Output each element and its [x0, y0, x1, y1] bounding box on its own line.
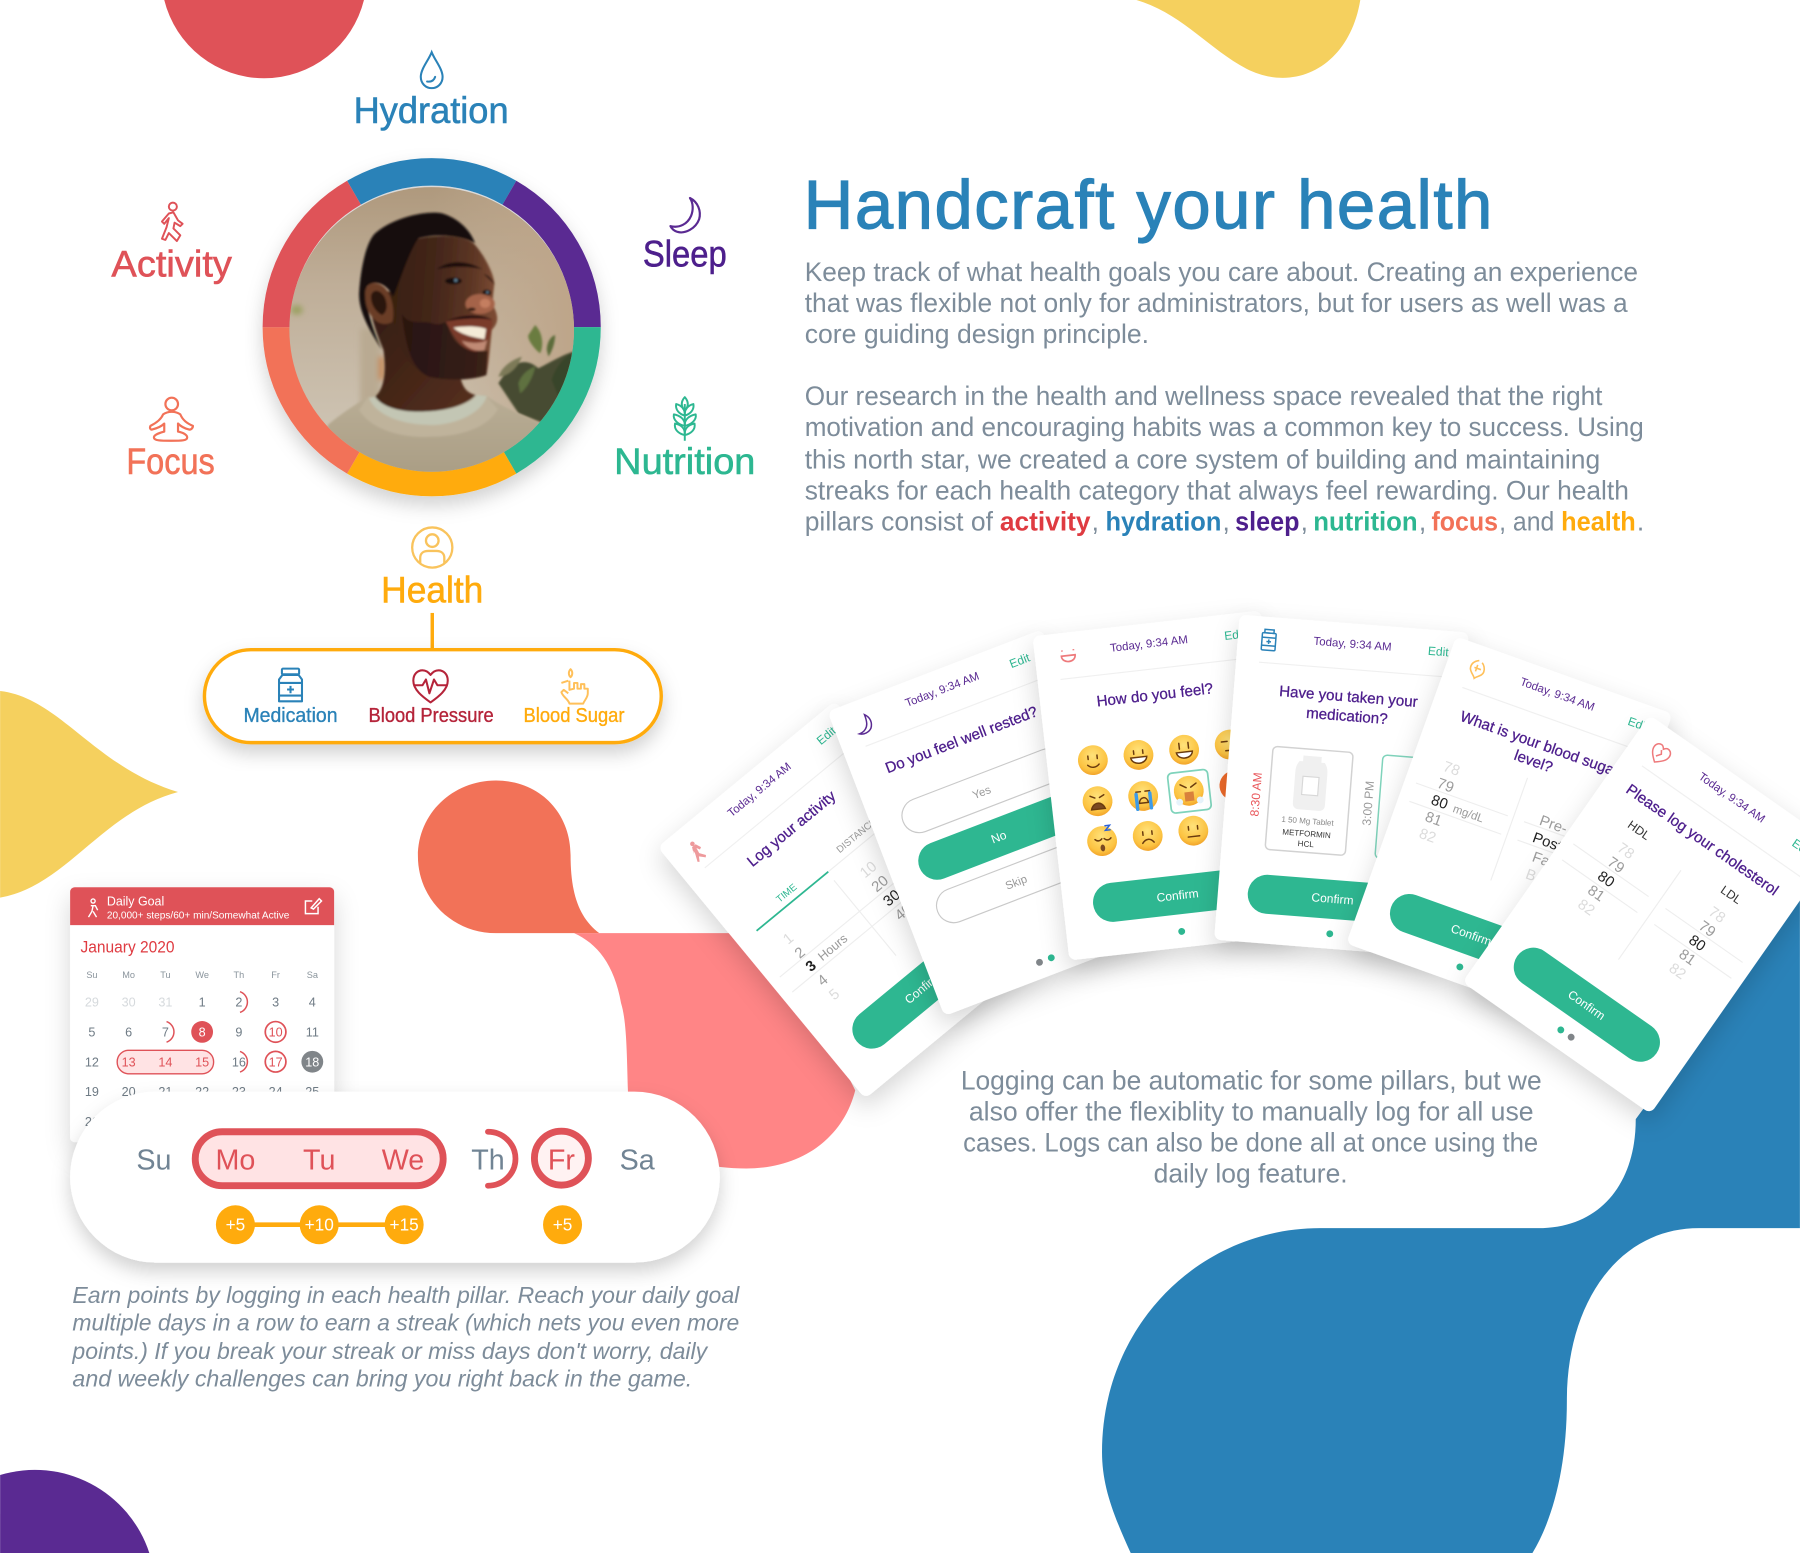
- label: Focus: [126, 441, 215, 482]
- pillar: activity: [111, 203, 233, 285]
- app card: log activity: 30: [880, 886, 904, 910]
- app card: well rested: No: [989, 828, 1009, 846]
- background shape: red circle: [164, 0, 364, 78]
- points badge: [543, 1205, 582, 1244]
- calendar card: [70, 887, 334, 1142]
- calendar header: Daily Goal: [107, 895, 164, 909]
- weekday header: Su: [86, 970, 98, 980]
- calendar dates: 20: [122, 1085, 136, 1099]
- wall: [285, 183, 578, 477]
- points streak connector: [216, 1205, 424, 1244]
- research paragraph: motivation and encouraging habits was a common key to success. Using: [805, 412, 1644, 442]
- points streak connector: +10: [305, 1214, 334, 1234]
- app card: well rested: Skip: [1004, 874, 1029, 893]
- calendar dates: 4: [309, 996, 316, 1010]
- weekday: Su: Su: [136, 1145, 171, 1177]
- app card: log activity: Log your activity: [744, 787, 840, 870]
- research paragraph: , and: [1499, 506, 1554, 536]
- research paragraph: health: [1561, 506, 1636, 536]
- app card: well rested: Edit: [1007, 650, 1032, 671]
- intro paragraph: that was flexible not only for administrators, but for users as well was a: [805, 288, 1628, 318]
- app card: cholesterol: 81: [1584, 882, 1608, 905]
- streak pill Mon-Wed: We: [382, 1145, 424, 1177]
- icon: person in circle: [412, 527, 452, 568]
- background shape: coral teardrop: [418, 781, 599, 933]
- app card: log activity: DISTANCE: [835, 816, 879, 856]
- calendar dates: 10: [269, 1025, 283, 1039]
- weekday header: Tu: [160, 970, 171, 980]
- calendar dates: 15: [195, 1055, 209, 1069]
- plant: [498, 325, 574, 423]
- background shape: purple circle: [0, 1470, 149, 1553]
- background shape: yellow left leaf: [0, 691, 178, 898]
- research paragraph: activity: [1000, 506, 1091, 536]
- icon: meditating person: [150, 398, 193, 441]
- icon: walking person: [162, 203, 183, 241]
- brows and eyes: [437, 262, 494, 285]
- calendar dates: 6: [125, 1025, 132, 1039]
- calendar dates: 3: [272, 996, 279, 1010]
- neck: [367, 287, 476, 412]
- app card: cholesterol: Confirm: [1565, 987, 1608, 1023]
- label: Nutrition: [614, 441, 755, 482]
- app card: cholesterol: HDL: [1625, 818, 1653, 843]
- research paragraph: pillars consist of: [805, 506, 994, 536]
- points caption: points.) If you break your streak or miss days don't worry, daily: [71, 1338, 709, 1364]
- connector line: [431, 613, 434, 650]
- app card: blood sugar: 81: [1423, 808, 1444, 830]
- app card: blood sugar: 79: [1435, 775, 1456, 797]
- calendar dates: 2: [235, 996, 242, 1010]
- month label: January 2020: [80, 938, 175, 957]
- weekday header: Sa: [307, 970, 319, 980]
- label: Activity: [111, 244, 233, 285]
- calendar dates: 17: [269, 1055, 283, 1069]
- research paragraph: focus: [1431, 506, 1498, 536]
- app card: blood sugar: Confirm: [1449, 921, 1493, 949]
- icon: finger prick hand: [561, 669, 588, 704]
- app card: how do you feel: Confirm: [1156, 886, 1199, 905]
- points badge: +5: [553, 1214, 572, 1234]
- label: blood sugar: Blood Sugar: [524, 705, 625, 727]
- app card: cholesterol: Please log your cholesterol: [1623, 781, 1781, 899]
- app card: how do you feel: Edit: [1223, 627, 1246, 643]
- label: medication: Medication: [243, 705, 338, 727]
- app card: log activity: Hours: [815, 931, 850, 964]
- calendar dates: 18: [305, 1055, 319, 1069]
- app card: cholesterol: 78: [1705, 903, 1729, 927]
- app card: cholesterol: [1463, 715, 1800, 1114]
- app card: well rested: Yes: [971, 784, 993, 802]
- app card: log activity: Confirm: [902, 969, 943, 1007]
- app card: medication: Have you taken your: [1279, 683, 1418, 711]
- partial day: Th: [471, 1132, 515, 1186]
- pillar: hydration: [354, 52, 509, 131]
- app card: log activity: 4: [814, 971, 831, 990]
- app card: log activity: 20: [868, 872, 892, 896]
- research paragraph: this north star, we created a core system of building and maintaining: [805, 444, 1600, 474]
- icon: smile: [1061, 649, 1076, 662]
- points caption: Earn points by logging in each health pillar. Reach your daily goal: [72, 1282, 740, 1308]
- title: Handcraft your health: [804, 166, 1492, 243]
- app card: log activity: [658, 701, 1042, 1099]
- label: Health: [381, 570, 483, 611]
- app card: log activity: 3: [802, 957, 820, 975]
- pillar: nutrition: [614, 397, 755, 482]
- points streak connector: +5: [226, 1214, 245, 1234]
- app card: cholesterol: 80: [1594, 868, 1618, 891]
- selected emoji highlight: [1167, 769, 1212, 814]
- app card: how do you feel: How do you feel?: [1096, 680, 1214, 710]
- pill option: metformin: 1 50 Mg Tablet: [1281, 815, 1335, 828]
- research paragraph: sleep: [1235, 506, 1299, 536]
- label: Sleep: [643, 233, 727, 274]
- app card: medication: [1214, 615, 1473, 958]
- app card: blood sugar: Ba: [1523, 866, 1547, 888]
- calendar dates: 16: [232, 1055, 246, 1069]
- research paragraph: ,: [1301, 506, 1308, 536]
- research paragraph: hydration: [1105, 506, 1221, 536]
- research paragraph: ,: [1092, 506, 1099, 536]
- beard: [402, 313, 488, 379]
- background shape: blue wave: [1102, 895, 1800, 1553]
- icon: water drop: [421, 52, 443, 88]
- app card: cholesterol: 79: [1695, 917, 1719, 941]
- icon: walker: [685, 839, 708, 863]
- mouth: [446, 315, 492, 352]
- logging caption: Logging can be automatic for some pillars, but we: [961, 1065, 1542, 1095]
- calendar dates: 8: [199, 1025, 206, 1039]
- app card: cholesterol: Today, 9:34 AM: [1696, 771, 1767, 826]
- pillar: sleep: [643, 198, 727, 274]
- icon: wheat: [674, 397, 696, 441]
- app card: cholesterol: LDL: [1718, 883, 1744, 907]
- background shape: yellow top blob: [1136, 0, 1360, 78]
- app card: cholesterol: 80: [1685, 932, 1709, 955]
- icon: medication bottle: [279, 669, 302, 701]
- logging caption: daily log feature.: [1154, 1158, 1348, 1188]
- app card: blood sugar: What is your blood sugar: [1458, 708, 1621, 781]
- app card: cholesterol: 78: [1614, 840, 1637, 863]
- calendar header: 20,000+ steps/60+ min/Somewhat Active: [107, 910, 289, 921]
- app card: blood sugar: Fa: [1530, 849, 1553, 871]
- icon: heart: [1647, 742, 1673, 767]
- health sub-pillars pill: [204, 650, 661, 743]
- calendar dates: 23: [232, 1085, 246, 1099]
- hair: [359, 213, 475, 350]
- app card: medication: Confirm: [1311, 890, 1354, 908]
- app card: blood sugar: [1346, 636, 1672, 1021]
- research paragraph: ,: [1419, 506, 1426, 536]
- icon: bottle: [1261, 629, 1277, 651]
- app card: log activity: 5: [826, 985, 843, 1004]
- logging caption: also offer the flexiblity to manually log for all use: [969, 1096, 1534, 1126]
- app card: medication: 3:00 PM: [1360, 780, 1377, 826]
- intro paragraph: [805, 257, 1638, 349]
- weekday: Sa: Sa: [620, 1145, 655, 1177]
- app card: cholesterol: 82: [1666, 960, 1689, 983]
- icon: moon: [854, 713, 874, 735]
- app card: blood sugar: Edit: [1626, 714, 1651, 734]
- app card: log activity: 2: [792, 944, 809, 962]
- profile ring with portrait: [276, 172, 587, 482]
- app card: log activity: 40: [892, 901, 915, 924]
- portrait illustration: [285, 183, 578, 480]
- calendar dates: 26: [85, 1115, 99, 1129]
- app card: cholesterol: 79: [1604, 854, 1627, 877]
- calendar dates: 12: [85, 1055, 99, 1069]
- complete day: Fr: Fr: [548, 1145, 575, 1177]
- label: blood pressure: Blood Pressure: [369, 705, 494, 727]
- weekday header: [86, 970, 319, 980]
- calendar dates: [85, 992, 323, 1129]
- app card: blood sugar: level?: [1512, 747, 1555, 776]
- app card: well rested: [828, 629, 1159, 1016]
- research paragraph: .: [1637, 506, 1644, 536]
- points streak connector: +15: [390, 1214, 419, 1234]
- app card: blood sugar: 78: [1441, 758, 1462, 780]
- calendar dates: 22: [195, 1085, 209, 1099]
- app card: blood sugar: 82: [1417, 825, 1438, 847]
- pill option: metformin: HCL: [1297, 839, 1315, 849]
- calendar dates: 21: [158, 1085, 172, 1099]
- logging caption: [961, 1065, 1542, 1188]
- calendar dates: 24: [269, 1085, 283, 1099]
- calendar dates: 14: [158, 1055, 172, 1069]
- research paragraph: nutrition: [1313, 506, 1418, 536]
- app card: blood sugar: mg/dL: [1451, 803, 1485, 825]
- app card: blood sugar: Post: [1530, 829, 1565, 856]
- nose: [465, 294, 495, 314]
- app card: medication: Today, 9:34 AM: [1313, 636, 1392, 654]
- app card: cholesterol: 82: [1574, 896, 1598, 919]
- app card: how do you feel: Today, 9:34 AM: [1109, 634, 1189, 655]
- points caption: and weekly challenges can bring you right back in the game.: [72, 1366, 692, 1392]
- calendar dates: 11: [306, 1025, 319, 1039]
- app card: log activity: 10: [857, 858, 880, 882]
- pill option: metformin: METFORMIN: [1282, 827, 1331, 840]
- calendar dates: 29: [85, 996, 99, 1010]
- calendar dates: 31: [158, 996, 172, 1010]
- calendar dates: 7: [162, 1025, 169, 1039]
- logging caption: cases. Logs can also be done all at once using the: [963, 1127, 1538, 1157]
- research paragraph: streaks for each health category that always feel rewarding. Our health: [805, 475, 1629, 505]
- app card: log activity: TIME: [774, 882, 800, 905]
- research paragraph: [805, 381, 1644, 536]
- ear: [365, 283, 393, 324]
- pillar: focus: [126, 398, 215, 482]
- calendar dates: 13: [122, 1055, 136, 1069]
- icon: moon: [670, 198, 700, 232]
- points caption: multiple days in a row to earn a streak (which nets you even more: [72, 1309, 739, 1335]
- face: [391, 236, 497, 379]
- app card: blood sugar: Pre-: [1537, 812, 1569, 838]
- app card: medication: 8:30 AM: [1247, 772, 1265, 817]
- streak pill Mon-Wed: Mo: [215, 1145, 255, 1177]
- app card: cholesterol: 81: [1676, 946, 1699, 969]
- weekday header: Fr: [271, 970, 280, 980]
- app card: well rested: Do you feel well rested?: [883, 703, 1040, 777]
- weekday header: We: [195, 970, 209, 980]
- icon: edit: [305, 899, 321, 914]
- intro paragraph: Keep track of what health goals you care about. Creating an experience: [805, 257, 1638, 287]
- app card: how do you feel: [1033, 610, 1298, 960]
- streak card: [70, 1092, 720, 1263]
- weekday header: Mo: [122, 970, 135, 980]
- icon: hand: [1467, 659, 1487, 681]
- calendar dates: 5: [88, 1025, 95, 1039]
- app card: log activity: 1: [780, 930, 797, 948]
- intro paragraph: core guiding design principle.: [805, 319, 1149, 349]
- background shape: pink flow: [574, 933, 855, 1168]
- streak pill Mon-Wed: Tu: [303, 1145, 335, 1177]
- app card: log activity: Edit: [814, 723, 839, 748]
- t-shirt collar: [369, 395, 487, 425]
- pillar: health: [381, 527, 483, 650]
- weekday header: Th: [233, 970, 244, 980]
- points caption: [71, 1282, 740, 1392]
- app card: log activity: Today, 9:34 AM: [726, 761, 794, 820]
- emoji grid: [1076, 728, 1255, 858]
- research paragraph: ,: [1223, 506, 1230, 536]
- app card: medication: Edit: [1427, 644, 1450, 659]
- calendar dates: 30: [122, 996, 136, 1010]
- complete day: Fr: [534, 1131, 588, 1185]
- label: Hydration: [354, 90, 509, 131]
- calendar dates: 19: [85, 1085, 99, 1099]
- research paragraph: Our research in the health and wellness space revealed that the right: [805, 381, 1603, 411]
- pill option: metformin: [1265, 746, 1353, 856]
- app card: blood sugar: Today, 9:34 AM: [1518, 676, 1596, 714]
- calendar header: [70, 887, 334, 925]
- app card: blood sugar: 80: [1429, 792, 1450, 813]
- calendar dates: 1: [199, 996, 206, 1010]
- calendar dates: 9: [235, 1025, 242, 1039]
- app card: well rested: Today, 9:34 AM: [904, 671, 981, 710]
- icon: heart with pulse: [413, 670, 448, 702]
- sweater: [318, 395, 552, 480]
- app card: medication: medication?: [1306, 705, 1388, 728]
- streak pill Mon-Wed: [195, 1132, 443, 1186]
- icon: walker: [88, 899, 98, 917]
- ring segments: [276, 172, 587, 482]
- calendar dates: 25: [305, 1085, 319, 1099]
- partial day: Th: Th: [471, 1145, 505, 1177]
